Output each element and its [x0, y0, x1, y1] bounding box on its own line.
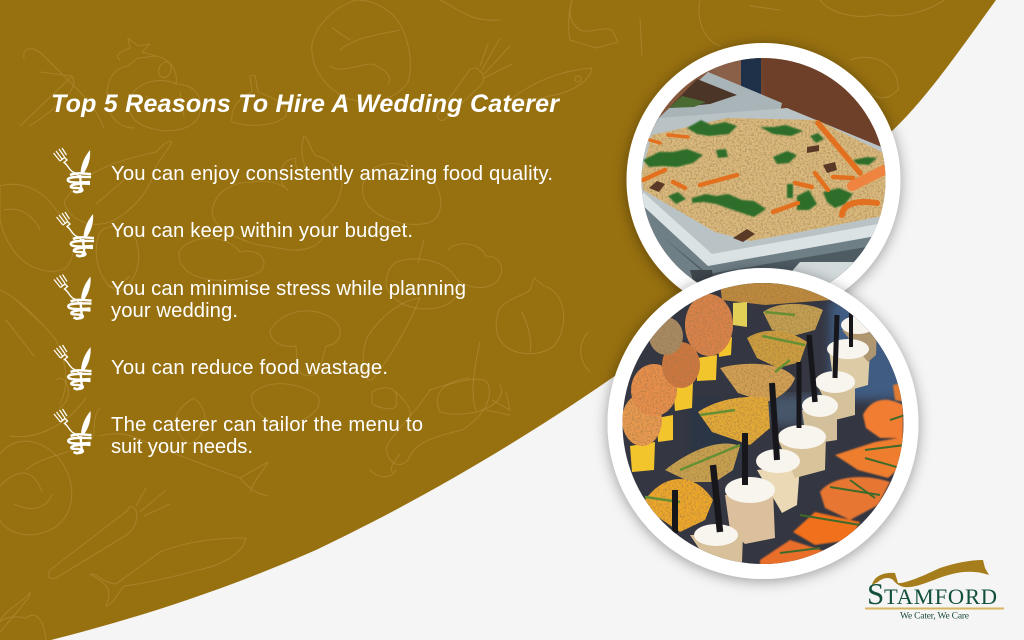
reason text 5: suit your needs.: [111, 436, 253, 458]
reason 2: [56, 212, 413, 256]
reason 4: [54, 345, 388, 389]
herbs: [643, 120, 877, 217]
pastry cups: [645, 304, 823, 532]
icon: fork and knife: [54, 148, 91, 192]
reason text 5: [111, 414, 423, 458]
logo tagline: We Cater, We Care: [900, 612, 969, 622]
logo wordmark: S: [867, 576, 884, 611]
reason text 4: You can reduce food wastage.: [111, 357, 388, 379]
dark mushrooms: [649, 145, 837, 242]
title: Top 5 Reasons To Hire A Wedding Caterer: [51, 90, 560, 118]
icon: fork and knife: [54, 409, 92, 453]
back tray: [650, 72, 782, 126]
reason text 3: your wedding.: [111, 300, 238, 322]
logo: Stamford: [865, 560, 1004, 622]
logo wordmark: TAMFORD: [884, 584, 997, 609]
logo swoosh: [872, 560, 989, 587]
reason 1: [54, 148, 553, 192]
reason 3: [54, 274, 466, 322]
reason text 1: You can enjoy consistently amazing food quality.: [111, 163, 553, 185]
main tray rim: [642, 108, 886, 278]
photo: rice tray in white ring: [626, 43, 900, 317]
top row: [720, 283, 830, 305]
icon: fork and knife: [54, 345, 92, 389]
reason text 2: You can keep within your budget.: [111, 220, 413, 242]
rice: [642, 118, 888, 241]
logo rule: [865, 608, 1004, 610]
mango cubes: [630, 302, 747, 472]
icon: fork and knife: [54, 274, 92, 319]
reason 5: [54, 409, 423, 458]
reason text 5: The caterer can tailor the menu to: [111, 414, 423, 436]
icon: fork and knife: [56, 212, 94, 256]
salmon: [760, 382, 905, 572]
photo: canapes in white ring: [608, 268, 918, 579]
cream rolls: [690, 316, 877, 565]
logo wordmark: [867, 576, 997, 611]
shrimp skewers: [622, 294, 733, 446]
carrots: [643, 123, 884, 215]
reason text 3: You can minimise stress while planning: [111, 278, 466, 300]
tray body below rim: [644, 202, 874, 283]
reason text 3: [111, 278, 466, 322]
black picks: [675, 313, 851, 533]
